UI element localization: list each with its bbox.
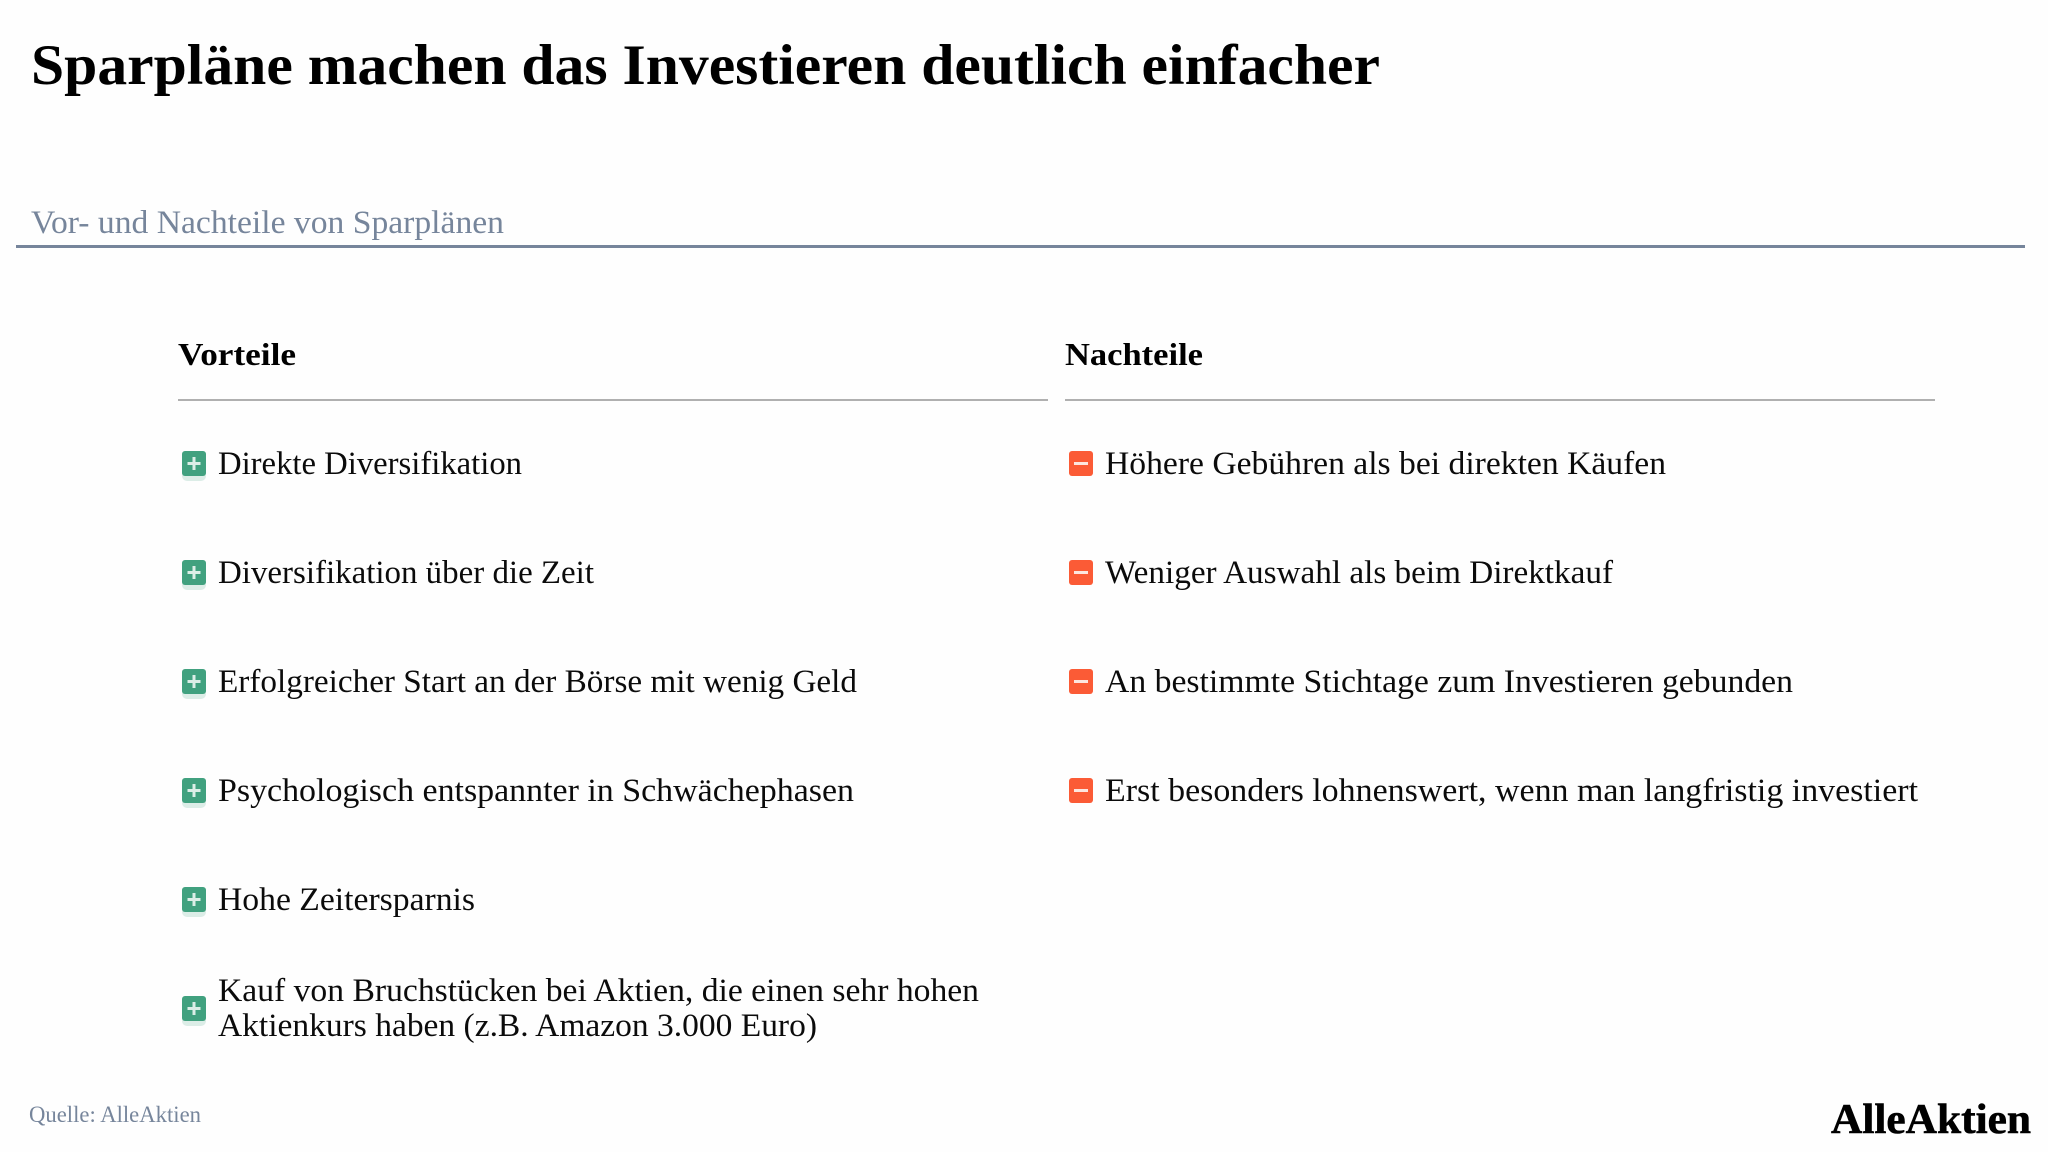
logo: AlleAktien: AlleAktien [1831, 1097, 2031, 1143]
heading: Vorteile: Vorteile [178, 337, 296, 372]
panel: Vorteile [178, 337, 1048, 1044]
advantage: Diversifikation über die Zeit: Diversifikation über die Zeit [218, 555, 594, 591]
disadvantage: Weniger Auswahl: Weniger Auswahl als beim Direktkauf [1105, 555, 1613, 591]
advantage: Hohe Zeitersparnis: Hohe Zeitersparnis [218, 882, 475, 918]
title: Sparpläne machen das Investieren deutlich einfacher [31, 34, 1380, 97]
advantage: Kauf von Bruchstücken [182, 973, 979, 1044]
advantage: Direkte Diversifikation: Direkte Diversifikation [218, 446, 522, 482]
panel: Nachteile [1065, 337, 1935, 809]
subtitle: Vor- und Nachteile von Sparplänen [31, 205, 504, 241]
disadvantage: Stichtage: An bestimmte Stichtage zum Investieren gebunden [1105, 664, 1793, 700]
advantage: Kauf von Bruchstücken: Kauf von Bruchstücken bei Aktien, die einen sehr hohen [218, 973, 979, 1009]
source note: Quelle: AlleAktien [29, 1102, 201, 1127]
advantage: Psychologisch entspannter: Psychologisch entspannter in Schwächephasen [218, 773, 854, 809]
disadvantage: Höhere Gebühren: Höhere Gebühren als bei direkten Käufen [1105, 446, 1666, 482]
advantage: Erfolgreicher Start: Erfolgreicher Start an der Börse mit wenig Geld [218, 664, 857, 700]
heading: Nachteile: Nachteile [1065, 337, 1203, 372]
disadvantage: langfristig: Erst besonders lohnenswert, wenn man langfristig investiert [1105, 773, 1918, 809]
advantage: Kauf von Bruchstücken: Aktienkurs haben (z.B. Amazon 3.000 Euro) [218, 1008, 817, 1044]
